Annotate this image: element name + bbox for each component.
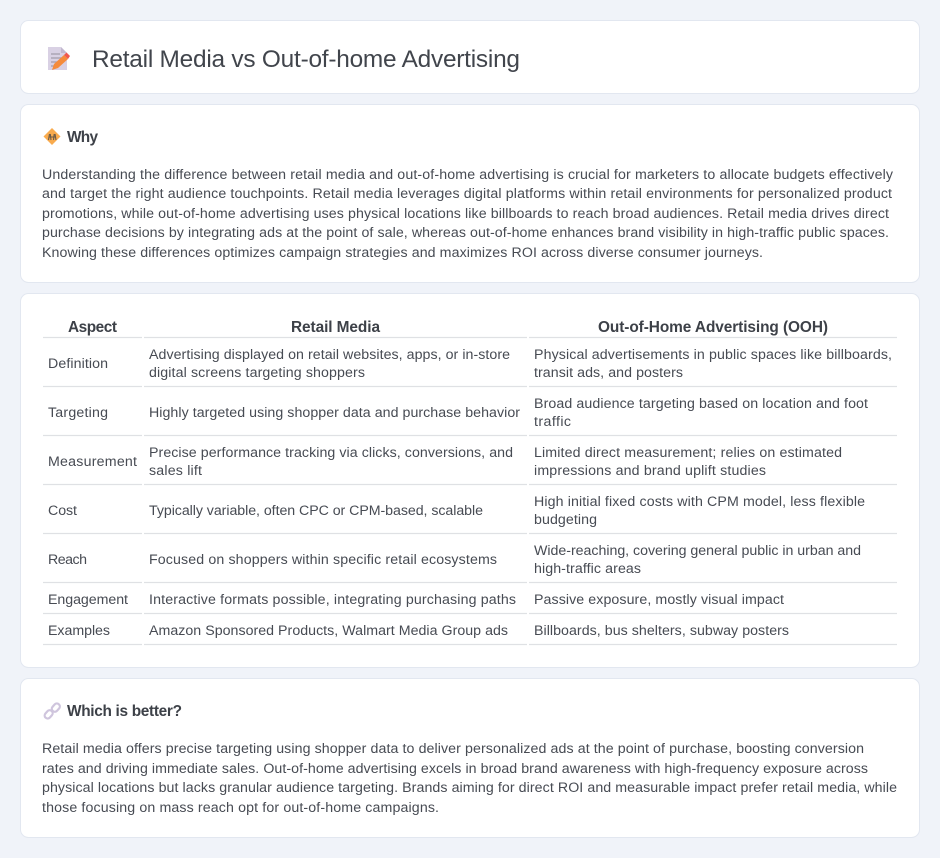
table row: definition: Physical advertisements in public spaces like billboards, [534,347,892,363]
table row: examples: Amazon Sponsored Products, Walmart Media Group ads [149,623,508,639]
icon: link [43,702,61,720]
text block: which is better paragraph: Retail media offers precise targeting using shopper data to deliver personalized ads at the point of purchase, boosting conversion [42,741,864,757]
table row: engagement: Passive exposure, mostly visual impact [534,592,784,608]
table row: cost: Typically variable, often CPC or CPM-based, scalable [149,503,483,519]
panel: which is better [20,678,920,838]
table row: examples [43,623,897,644]
table row: cost: High initial fixed costs with CPM model, less flexible [534,494,865,510]
table row: measurement: sales lift [149,463,202,479]
table row: examples: Billboards, bus shelters, subway posters [534,623,789,639]
table row: measurement: Limited direct measurement; relies on estimated [534,445,842,461]
table row: definition: transit ads, and posters [534,365,683,381]
text block: which is better paragraph: physical locations but lacks granular audience targeting. Brands aiming for direct ROI and measurable impact prefer retail media, while [42,780,897,796]
text block: why paragraph: promotions, while out-of-home advertising uses physical locations like billboards to reach broad audiences. Retail media drives direct [42,206,889,222]
table row: cost [43,494,897,534]
text block: why paragraph: and target the right audience touchpoints. Retail media leverages digital platforms within retail environments for personalized product [42,186,892,202]
table row: examples: Examples [48,623,110,639]
table header row: Retail Media [291,319,380,336]
table row: targeting: traffic [534,414,571,430]
table row: definition [43,347,897,386]
table row: measurement: impressions and brand uplift studies [534,463,766,479]
icon: memo with pencil [48,47,70,70]
table header row [43,319,897,338]
table row: engagement [43,592,897,614]
table row: cost: budgeting [534,512,597,528]
table row: engagement: Interactive formats possible, integrating purchasing paths [149,592,516,608]
table row: cost: Cost [48,503,77,519]
table row: targeting: Targeting [48,405,108,421]
text block: why paragraph: Understanding the difference between retail media and out-of-home advertising is crucial for marketers to allocate budgets effectively [42,167,894,183]
table row: reach: Reach [48,552,87,568]
icon: warning diamond [44,128,60,145]
table row: reach: Wide-reaching, covering general public in urban and [534,543,861,559]
table header row: Aspect [68,319,117,336]
table row: targeting: Broad audience targeting based on location and foot [534,396,868,412]
table row: reach: Focused on shoppers within specific retail ecosystems [149,552,497,568]
panel: comparison table [20,294,920,668]
table row: reach: high-traffic areas [534,561,641,577]
table row: targeting [43,396,897,436]
table row: definition: Advertising displayed on retail websites, apps, or in-store [149,347,510,363]
panel: why [20,104,920,282]
title: Retail Media vs Out-of-home Advertising [92,46,520,73]
table row: engagement: Engagement [48,592,128,608]
panel: title header [20,20,920,94]
table row: definition: digital screens targeting shoppers [149,365,365,381]
text block: why paragraph: purchase decisions by integrating ads at the point of sale, whereas out-of-home enhances brand visibility in high-traffic public spaces. [42,225,889,241]
table row: measurement: Measurement [48,454,137,470]
text block: why paragraph: Knowing these differences optimizes campaign strategies and maximizes ROI across diverse consumer journeys. [42,245,763,261]
text block: which is better paragraph: rates and driving immediate sales. Out-of-home advertising excels in broad brand awareness with high-frequency exposure across [42,761,868,777]
table row: reach [43,543,897,582]
table header row: Out-of-Home Advertising (OOH) [598,319,828,336]
table row: targeting: Highly targeted using shopper data and purchase behavior [149,405,520,421]
heading: which is better: Which is better? [67,703,182,720]
text block: why paragraph [42,167,894,261]
heading: why: Why [67,129,98,146]
text block: which is better paragraph: those focusing on mass reach opt for out-of-home campaigns. [42,800,439,816]
table row: measurement: Precise performance tracking via clicks, conversions, and [149,445,513,461]
table row: measurement [43,445,897,484]
text block: which is better paragraph [42,741,897,816]
table row: definition: Definition [48,356,108,372]
